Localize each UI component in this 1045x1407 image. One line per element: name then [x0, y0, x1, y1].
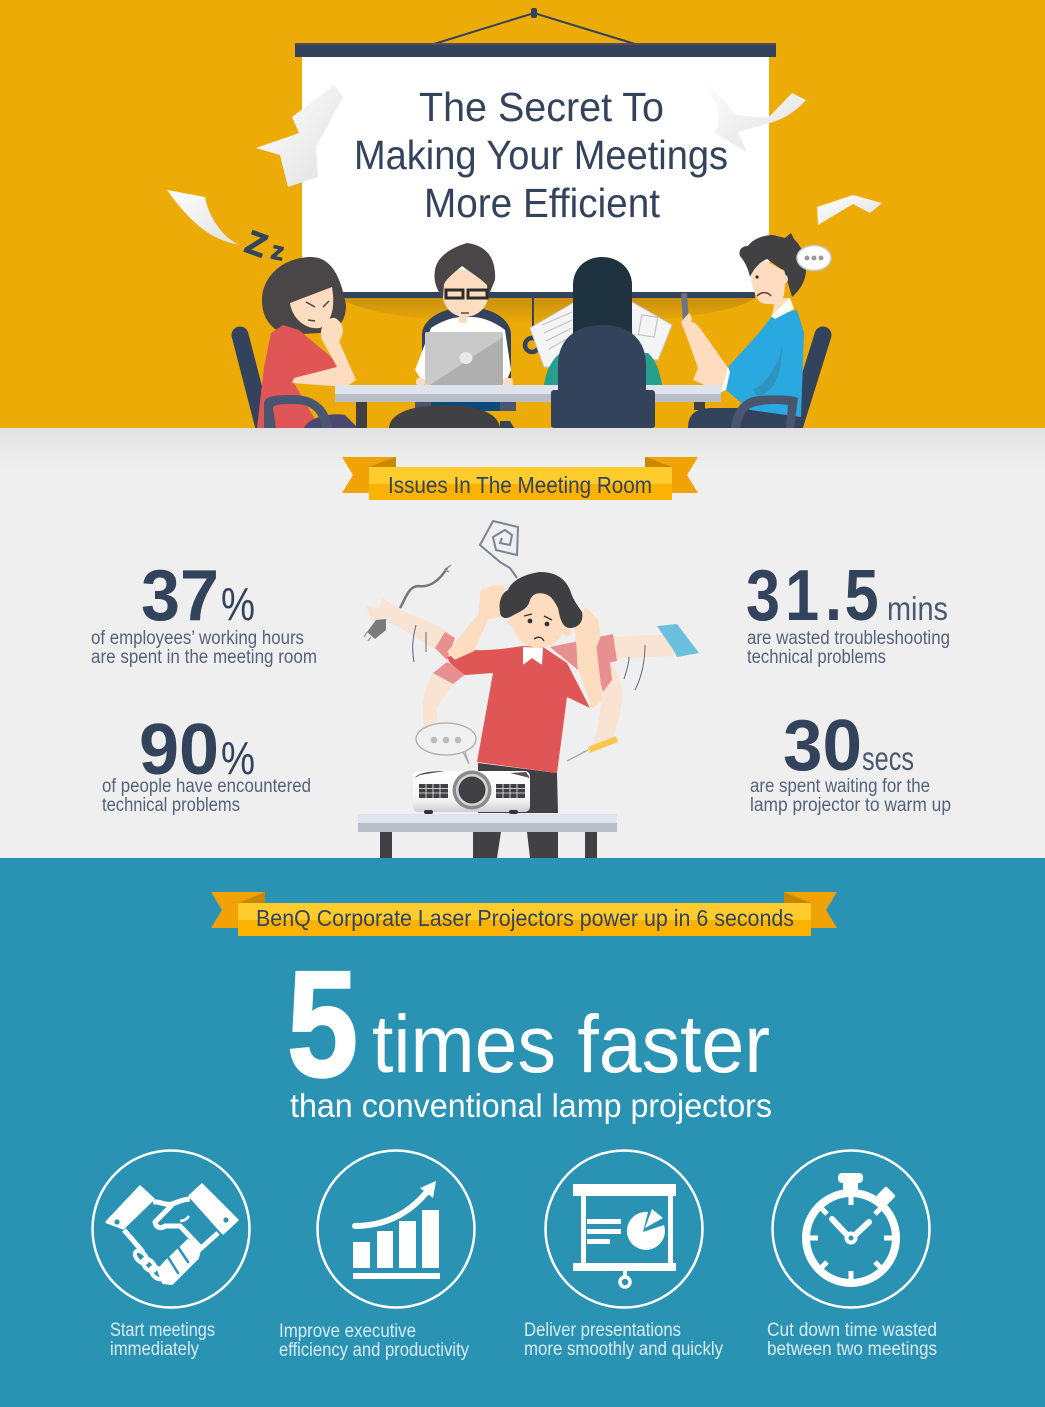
person: woman from behind with newspaper: [525, 257, 672, 385]
stat: 31.5 mins: mins: [887, 590, 948, 627]
stat: 90 percent: 90: [139, 710, 219, 790]
stat: 37 percent: 37: [141, 556, 219, 636]
chair arm: right: [731, 395, 798, 428]
flying papers: [167, 78, 882, 245]
person: man with glasses and laptop: [389, 243, 516, 428]
ribbon heading: BenQ: BenQ Corporate Laser Projectors power up in 6 seconds: [256, 905, 794, 931]
stat: 90 percent: of people have encountered: [102, 776, 311, 797]
illustration: stressed man with projector: [358, 521, 699, 858]
stat: 30 secs: are spent waiting for the: [750, 776, 930, 797]
ribbon heading: BenQ: [211, 892, 837, 936]
icon: blue book: [657, 624, 699, 657]
title: More Efficient: [424, 180, 661, 226]
raised arms: [449, 587, 601, 707]
stat: 31.5 mins: are wasted troubleshooting: [747, 628, 950, 649]
icon: handshake: [107, 1185, 237, 1284]
stat: 31.5 mins: 31.5: [746, 556, 879, 636]
caption: Cut down time wasted: [767, 1320, 937, 1341]
caption: between two meetings: [767, 1339, 937, 1360]
stat: 30 secs: lamp projector to warm up: [750, 795, 951, 816]
stat: 37 percent: %: [221, 578, 255, 630]
caption: [524, 1320, 723, 1360]
icon: stopwatch: [806, 1173, 896, 1283]
headline: 5 times faster: times faster: [372, 999, 770, 1090]
caption: [110, 1320, 215, 1360]
title: The Secret To: [419, 84, 664, 130]
stat: 30 secs: secs: [862, 740, 914, 777]
caption: more smoothly and quickly: [524, 1339, 723, 1360]
benefit: deliver presentations: [524, 1150, 723, 1360]
benefit: improve productivity: [279, 1150, 474, 1361]
stat: 90 percent: [102, 710, 311, 816]
headline: 5 times faster: [287, 939, 772, 1124]
sleeping Zz: Z: [241, 223, 272, 264]
icon: frustration spiral: [480, 521, 518, 578]
sleeping Zz: [241, 223, 287, 266]
sleeping Zz: z: [269, 236, 287, 266]
ribbon heading: issues: [342, 457, 698, 500]
panel: issues in the meeting room: [0, 428, 1045, 858]
caption: efficiency and productivity: [279, 1340, 469, 1361]
stat: 90 percent: %: [221, 732, 255, 784]
benefit: cut down time: [767, 1150, 937, 1360]
panel: hero meeting room: [0, 0, 1045, 428]
person: man with phone and blue shirt: [681, 233, 831, 428]
face: [500, 572, 582, 648]
benefit: start meetings: [92, 1150, 250, 1360]
ribbon heading: issues: Issues In The Meeting Room: [388, 472, 652, 498]
icon: presentation screen: [573, 1184, 676, 1287]
caption: immediately: [110, 1339, 199, 1360]
icon: plug and cable: [364, 565, 451, 641]
panel: BenQ laser projector benefits: [0, 858, 1045, 1407]
caption: [767, 1320, 937, 1360]
caption: Deliver presentations: [524, 1320, 681, 1341]
collar: [523, 647, 543, 665]
caption: [279, 1321, 469, 1361]
caption: Start meetings: [110, 1320, 215, 1341]
caption: Improve executive: [279, 1321, 416, 1342]
stat: 31.5 mins: technical problems: [747, 647, 886, 668]
red shirt: [447, 646, 590, 773]
trousers: [473, 763, 558, 858]
stat: 37 percent: are spent in the meeting room: [91, 647, 317, 668]
icon: screwdriver: [567, 736, 618, 761]
person: sleeping woman: [240, 257, 358, 428]
stat: 30 secs: [750, 706, 951, 816]
title: Making Your Meetings: [354, 132, 728, 178]
meeting table: [335, 325, 721, 428]
stat: 37 percent: of employees’ working hours: [91, 628, 304, 649]
stat: 90 percent: technical problems: [102, 795, 240, 816]
headline: 5 times faster: than conventional lamp projectors: [290, 1087, 772, 1124]
stat: 37 percent: [91, 556, 317, 668]
speech bubble: [416, 723, 476, 764]
projector: [413, 770, 530, 814]
icon: rising bar chart: [353, 1181, 440, 1279]
stat: 30 secs: 30: [783, 706, 862, 786]
projector screen: [295, 8, 776, 324]
desk: [358, 814, 617, 858]
motion lines: [413, 625, 645, 690]
title: [354, 84, 728, 226]
stat: 31.5 mins: [746, 556, 950, 668]
headline: 5 times faster: 5: [287, 939, 358, 1108]
faded extra arms: [368, 600, 685, 755]
